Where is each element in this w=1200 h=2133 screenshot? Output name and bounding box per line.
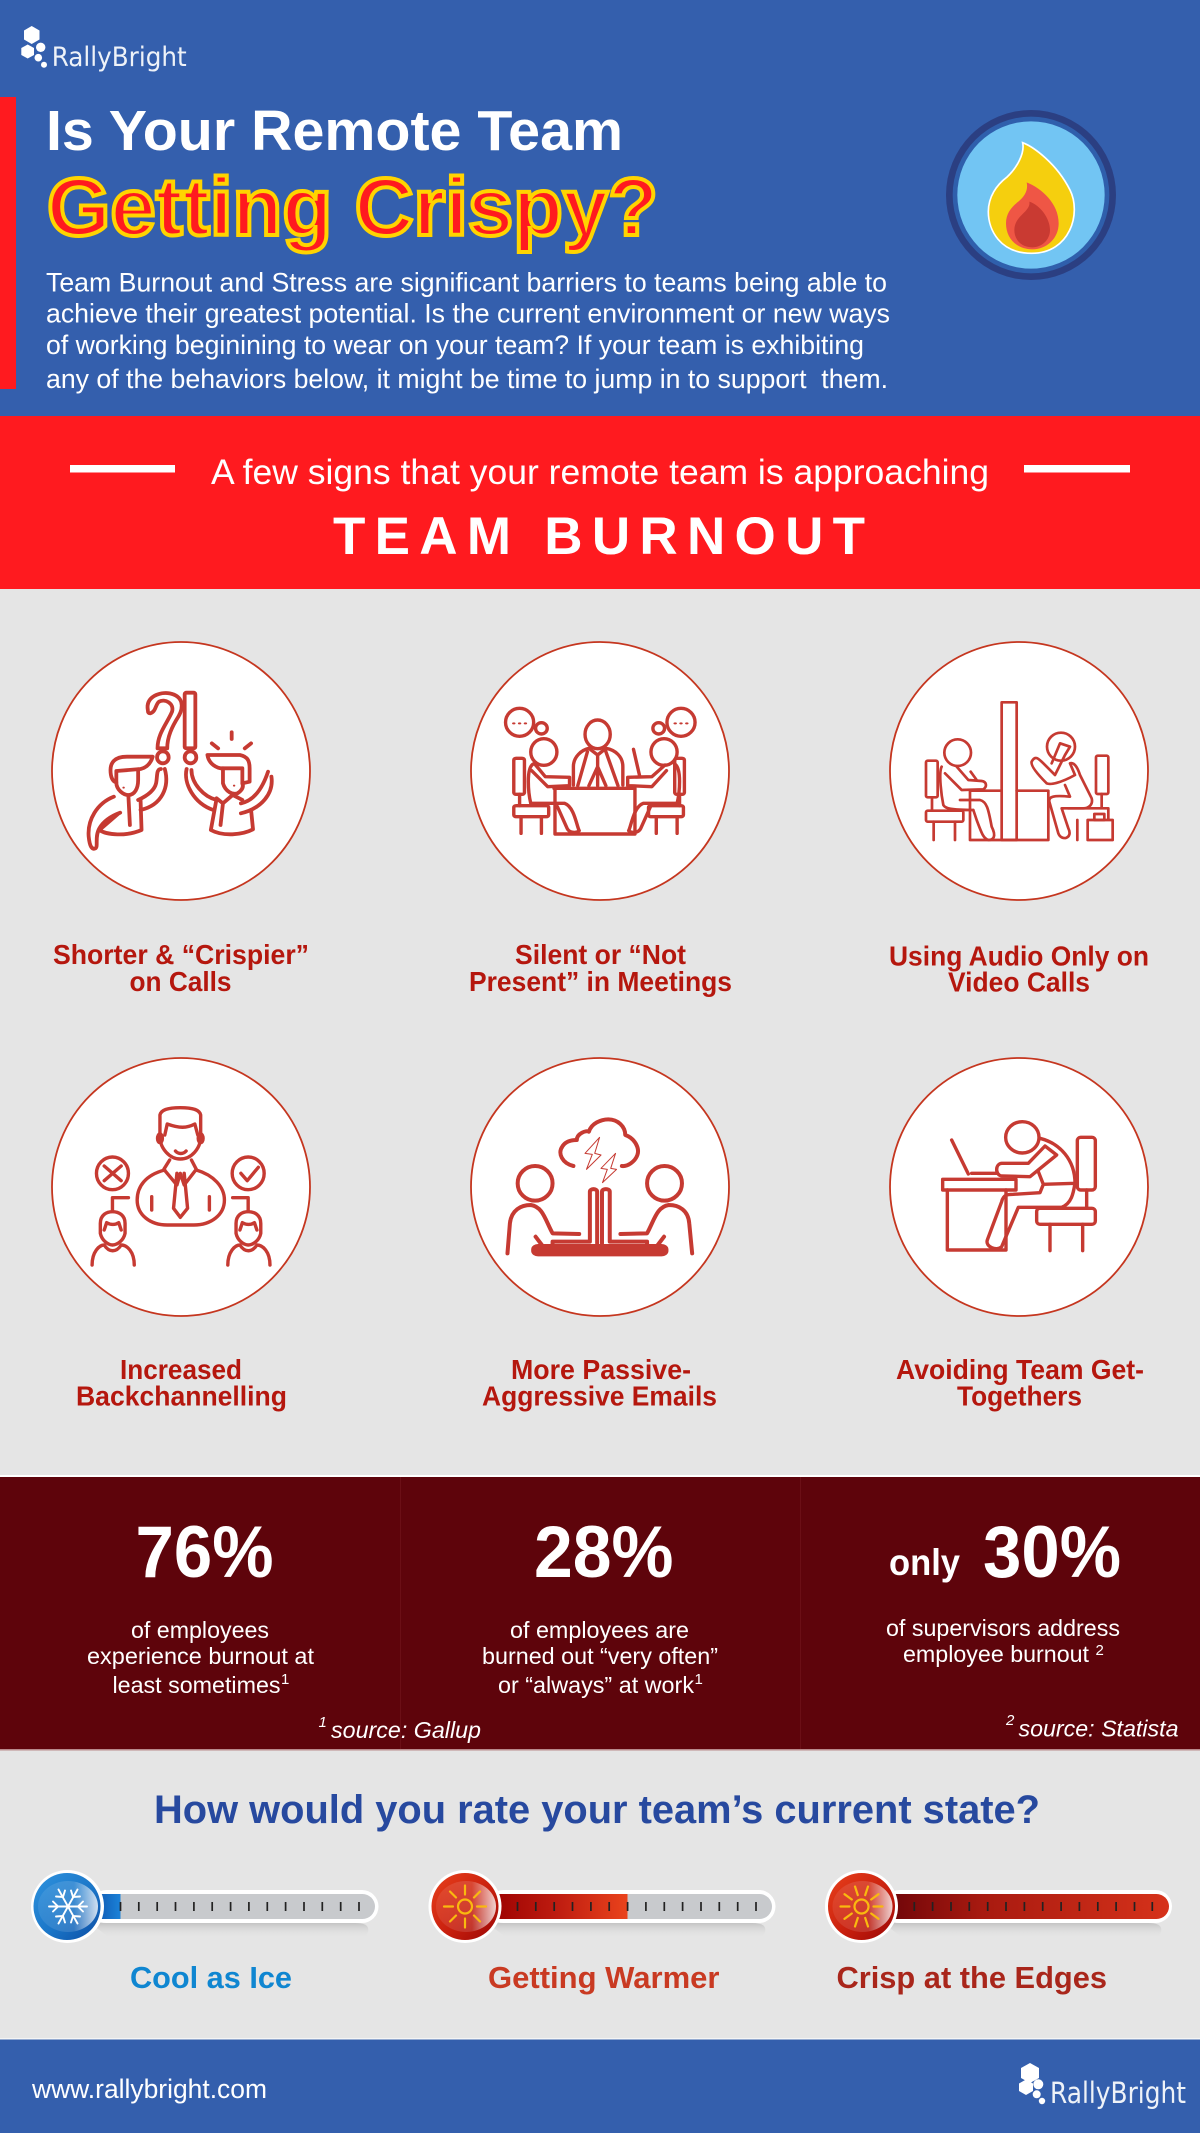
sign: audio only on video calls [889, 642, 1149, 998]
stat: 28 percent: burned out “very often” [482, 1643, 718, 1669]
stat: 28 percent: 28% [534, 1512, 674, 1593]
intro text [46, 268, 890, 394]
logo: RallyBright: RallyBright [52, 42, 187, 73]
stat: 76 percent: experience burnout at [87, 1643, 314, 1669]
label: on Calls [130, 966, 232, 997]
thermometer: cool as ice [31, 1870, 378, 1943]
stat: 76 percent [87, 1512, 314, 1698]
rating heading: How would you rate your team’s current state? [154, 1788, 1040, 1832]
panel: signs of burnout [0, 589, 1200, 1475]
title: line two: Getting Crispy? [47, 162, 658, 253]
icon: flame badge [946, 110, 1116, 280]
stat: 28 percent: or “always” at work [498, 1672, 694, 1698]
thermometer: crisp at the edges [825, 1870, 1172, 1943]
icon: meeting around a table [506, 708, 695, 834]
label [896, 1354, 1144, 1412]
source: Statista: 2 [1005, 1712, 1015, 1729]
icon: sun [444, 1886, 486, 1928]
label [53, 939, 309, 997]
label: Increased [120, 1354, 242, 1385]
label: Aggressive Emails [482, 1380, 717, 1412]
thermometer label: Crisp at the Edges [836, 1960, 1107, 1995]
stat: only 30 percent: of supervisors address [886, 1615, 1120, 1641]
sign: silent in meetings [469, 642, 732, 997]
stat: 76 percent: of employees [131, 1617, 269, 1643]
banner heading: TEAM BURNOUT [333, 507, 865, 566]
icon: manager and two reports [92, 1108, 270, 1265]
sign: increased backchannelling [52, 1058, 310, 1412]
label [76, 1354, 287, 1412]
icon: sun [840, 1886, 882, 1926]
stat: only 30 percent: employee burnout [903, 1641, 1089, 1667]
label: Avoiding Team Get- [896, 1354, 1144, 1385]
thermometer label: Getting Warmer [488, 1960, 720, 1995]
stat: 28 percent [482, 1512, 718, 1698]
panel: team burnout banner [0, 416, 1200, 589]
label: Backchannelling [76, 1380, 287, 1412]
source: Gallup: 1 [318, 1714, 327, 1731]
label: Video Calls [948, 966, 1090, 998]
label: More Passive- [511, 1354, 691, 1385]
banner subtitle: A few signs that your remote team is approaching [211, 453, 989, 492]
stat: 76 percent: 76% [136, 1512, 274, 1593]
thermometer label: Cool as Ice [130, 1960, 292, 1995]
sign: avoiding team get-togethers [890, 1058, 1148, 1412]
intro text: Team Burnout and Stress are significant barriers to teams being able to [46, 268, 887, 298]
label: Togethers [957, 1380, 1082, 1412]
label: Silent or “Not [515, 939, 686, 970]
intro text: of working beginining to wear on your team? If your team is exhibiting [46, 330, 864, 360]
icon: people at divided desk [926, 702, 1113, 840]
stat: 76 percent: least sometimes [112, 1672, 280, 1698]
panel: header [0, 0, 1200, 416]
icon: snowflake [49, 1890, 87, 1924]
thermometer: getting warmer [428, 1870, 776, 1943]
sign: passive-aggressive emails [471, 1058, 729, 1412]
source: Statista: source: Statista [1018, 1716, 1178, 1742]
label [469, 939, 732, 997]
stat: 76 percent: 1 [281, 1671, 289, 1688]
icon: two arguing people [89, 693, 272, 849]
title: line one: Is Your Remote Team [46, 99, 623, 163]
panel: statistics [0, 1475, 1200, 1749]
label: Present” in Meetings [469, 966, 732, 997]
accent bar [0, 97, 16, 389]
icon: slumped person at desk [943, 1122, 1095, 1251]
website url: www.rallybright.com [31, 2074, 267, 2104]
intro text: any of the behaviors below, it might be time to jump in to support them. [46, 364, 888, 394]
sign: shorter and crispier on calls [52, 642, 310, 997]
label: Shorter & “Crispier” [53, 939, 309, 970]
stat: 28 percent: of employees are [510, 1617, 689, 1643]
stat: 28 percent: 1 [694, 1671, 703, 1688]
stat: only 30 percent: only [889, 1542, 960, 1583]
label: Using Audio Only on [889, 940, 1149, 972]
stat: only 30 percent [886, 1512, 1121, 1667]
source: Gallup: source: Gallup [331, 1717, 481, 1743]
label [889, 940, 1149, 998]
intro text: achieve their greatest potential. Is the current environment or new ways [46, 298, 890, 328]
icon: two people at laptops under a storm cloud [507, 1119, 692, 1254]
panel: team rating [0, 1749, 1200, 2039]
stat: only 30 percent: 30% [983, 1512, 1121, 1593]
label [482, 1354, 717, 1412]
panel: footer [0, 2038, 1200, 2133]
logo: RallyBright [1019, 2063, 1186, 2110]
stat: only 30 percent: 2 [1096, 1642, 1104, 1659]
logo: RallyBright [21, 26, 187, 73]
